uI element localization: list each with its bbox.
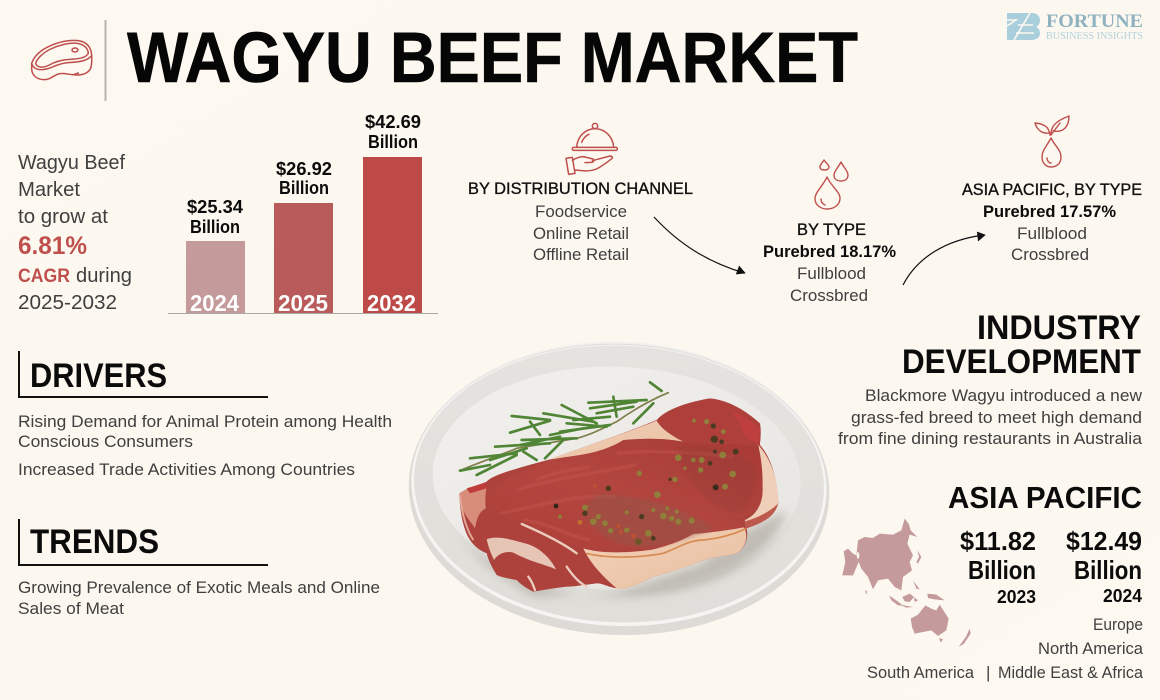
text: industry development detail: grass-fed breed to meet high demand	[851, 408, 1142, 427]
bar 2024: 2024	[190, 290, 239, 316]
logo: Fortune Business Insights	[1007, 11, 1143, 42]
panel: CAGR statement: CAGR	[18, 266, 70, 287]
heading: industry development	[902, 309, 1141, 381]
text: by distribution channel	[468, 179, 693, 264]
text: industry development detail: from fine dining restaurants in Australia	[838, 429, 1143, 448]
trend text: Growing Prevalence of Exotic Meals and Online	[18, 578, 380, 597]
driver list: Conscious Consumers	[18, 432, 193, 451]
bar 2032: $42.69	[365, 112, 421, 132]
stat: asia pacific 2024: 2024	[1103, 586, 1142, 606]
text: asia pacific by type: ASIA PACIFIC, BY TYPE	[962, 180, 1142, 199]
text: asia pacific by type	[962, 180, 1142, 264]
stat: asia pacific 2023: $11.82	[960, 526, 1036, 556]
logo: Fortune Business Insights: BUSINESS INSIGHTS	[1046, 31, 1143, 42]
map: asia pacific	[842, 519, 971, 647]
bar 2024	[186, 197, 245, 316]
panel: drivers	[18, 351, 392, 479]
text: other regions: |	[986, 663, 990, 682]
illustration: steak on a plate	[404, 334, 834, 642]
stat: asia pacific 2023	[960, 526, 1036, 607]
text: by type: Fullblood	[797, 264, 866, 283]
text: other regions: Middle East & Africa	[998, 663, 1144, 682]
bar chart: market size	[168, 112, 438, 316]
text: asia pacific by type: Purebred 17.57%	[983, 202, 1116, 221]
rosemary sprig	[460, 382, 668, 475]
panel: CAGR statement: Wagyu Beef	[18, 152, 125, 174]
bar 2024: Billion	[190, 217, 240, 237]
bar 2025	[274, 159, 333, 316]
text: other regions: North America	[1038, 639, 1144, 658]
panel: CAGR statement: Market	[18, 179, 80, 201]
text: asia pacific by type: Crossbred	[1011, 245, 1089, 264]
bar 2025: Billion	[279, 178, 329, 198]
text: by type: Crossbred	[790, 286, 868, 305]
peppercorns	[554, 419, 739, 545]
plate	[404, 334, 834, 642]
text: by type	[763, 220, 896, 305]
stat: asia pacific 2024	[1066, 526, 1142, 606]
panel: CAGR statement: to grow at	[18, 206, 108, 228]
heading: trends: TRENDS	[30, 523, 159, 561]
trend text	[18, 578, 380, 618]
heading: industry development: DEVELOPMENT	[902, 343, 1141, 381]
text: by type: Purebred 18.17%	[763, 242, 896, 261]
stat: asia pacific 2023: 2023	[997, 587, 1036, 607]
text: by distribution channel: Offline Retail	[533, 245, 629, 264]
text: by distribution channel: Foodservice	[535, 202, 627, 221]
icon: droplets	[815, 160, 848, 209]
icon: cloche and hand	[566, 123, 617, 174]
text: asia pacific by type: Fullblood	[1017, 224, 1087, 243]
text: by distribution channel: BY DISTRIBUTION CHANNEL	[468, 179, 693, 198]
icon: plant and drop	[1035, 116, 1069, 167]
text: other regions	[867, 615, 1144, 682]
text: industry development detail	[838, 386, 1143, 448]
driver list	[18, 412, 392, 479]
arrow: distribution to type	[654, 217, 745, 274]
logo: Fortune Business Insights: FORTUNE	[1046, 11, 1143, 32]
meat texture	[500, 452, 733, 540]
bar 2032	[363, 112, 422, 316]
stat: asia pacific 2023: Billion	[968, 555, 1036, 585]
heading: asia pacific: ASIA PACIFIC	[948, 480, 1142, 515]
trend text: Sales of Meat	[18, 599, 124, 618]
driver list: Increased Trade Activities Among Countries	[18, 460, 355, 479]
bar 2032: Billion	[368, 132, 418, 152]
arrow: type to asia pacific	[903, 232, 985, 285]
panel: CAGR statement: 2025-2032	[18, 292, 117, 314]
heading: drivers: DRIVERS	[30, 357, 167, 395]
icon: steak	[32, 40, 92, 80]
stat: asia pacific 2024: Billion	[1074, 555, 1142, 585]
bar 2032: 2032	[367, 290, 416, 316]
text: other regions: South America	[867, 663, 975, 682]
rosemary and steak	[459, 382, 778, 592]
text: by distribution channel: Online Retail	[533, 224, 629, 243]
steak	[459, 398, 778, 592]
driver list: Rising Demand for Animal Protein among Health	[18, 412, 392, 431]
bar 2024: $25.34	[187, 197, 243, 217]
divider	[104, 20, 106, 101]
title: WAGYU BEEF MARKET	[127, 19, 858, 98]
bar 2025: $26.92	[276, 159, 332, 179]
stat: asia pacific 2024: $12.49	[1066, 526, 1142, 556]
bar 2025: 2025	[278, 290, 328, 316]
panel: CAGR statement	[18, 152, 132, 314]
text: other regions: Europe	[1093, 615, 1143, 634]
CAGR value: 6.81%	[18, 232, 87, 260]
panel: CAGR statement: during	[76, 265, 132, 287]
text: industry development detail: Blackmore Wagyu introduced a new	[865, 386, 1143, 405]
text: by type: BY TYPE	[797, 220, 866, 239]
heading: industry development: INDUSTRY	[977, 309, 1141, 347]
panel: trends	[18, 519, 380, 618]
